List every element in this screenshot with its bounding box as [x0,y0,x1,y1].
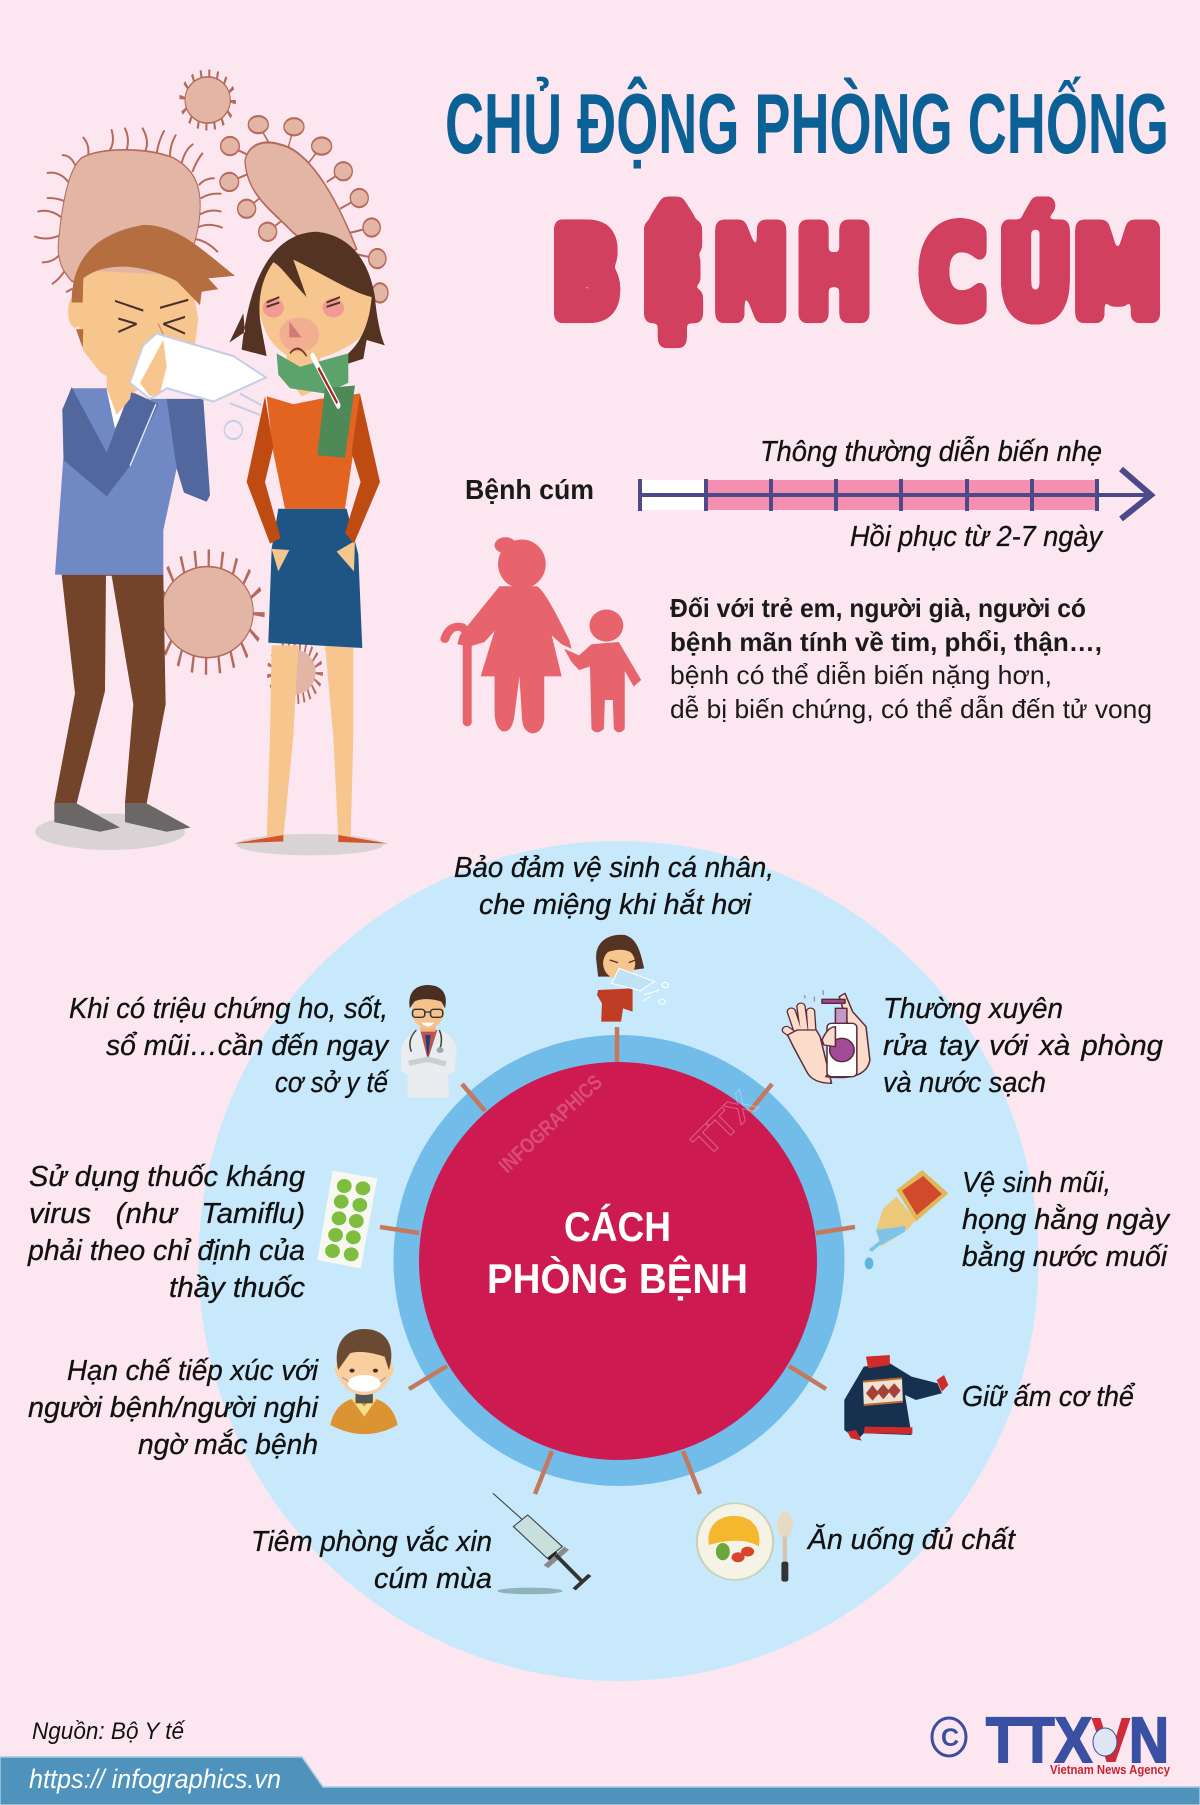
text block: high-risk groups: Đối với trẻ em, người già, người có [670,593,1086,623]
text: nose and throat hygiene [962,1167,1170,1273]
text: wash hands: rửa tay với xà phòng [883,1030,1163,1062]
text: antiviral medicine [27,1161,305,1304]
icon: pill blister pack [317,1171,377,1268]
text: wash hands: và nước sạch [883,1067,1046,1099]
text: limit contact: người bệnh/người nghi [28,1392,320,1424]
icon: small virus top [183,75,232,125]
text: nose and throat hygiene: họng hằng ngày [962,1203,1170,1236]
icon: grandmother and child silhouette [445,537,641,733]
text: see a doctor: sổ mũi…cần đến ngay [106,1030,389,1062]
heading: center label: PHÒNG BỆNH [487,1254,748,1302]
footer band [0,1757,1200,1805]
text block: high-risk groups [670,593,1152,724]
heading: bệnh cúm: BỆNH [553,205,871,342]
text: limit contact: ngờ mắc bệnh [138,1428,318,1461]
text: vaccination [251,1525,492,1595]
logo: TTXVN: V [1091,1704,1131,1776]
text: vaccination: cúm mùa [374,1563,492,1595]
panel: prevention circle: TTX [685,1083,766,1164]
heading: bệnh cúm [553,204,1161,342]
text: antiviral medicine: Sử dụng thuốc kháng [29,1161,305,1193]
logo: TTXVN [932,1704,1171,1777]
heading: center label [487,1203,748,1302]
text: antiviral medicine: thầy thuốc [169,1272,305,1304]
figure: man sneezing [35,225,266,850]
text: vaccination: Tiêm phòng vắc xin [251,1525,492,1558]
heading: center label: CÁCH [564,1203,671,1250]
text: eat well: Ăn uống đủ chất [806,1523,1017,1556]
logo: TTXVN: N [1129,1704,1169,1776]
icon: sweater [844,1355,948,1441]
text: wash hands: Thường xuyên [883,993,1063,1025]
text: see a doctor: cơ sở y tế [275,1067,390,1099]
text: limit contact: Hạn chế tiếp xúc với [67,1355,319,1387]
text block: high-risk groups: bệnh mãn tính về tim, phổi, thận…, [670,627,1102,657]
text: see a doctor [69,993,390,1099]
text block: high-risk groups: dễ bị biến chứng, có thể dẫn đến tử vong [670,694,1152,724]
text: personal hygiene: che miệng khi hắt hơi [479,888,753,921]
footer url: https:// infographics.vn [29,1764,281,1794]
heading: bệnh cúm: CÚM [921,204,1161,342]
text: personal hygiene: Bảo đảm vệ sinh cá nhân, [454,852,774,884]
icon: large virus behind man [35,128,222,297]
logo: TTXVN: C [941,1724,959,1752]
illustration: sick man and woman with viruses [35,75,388,855]
text: limit contact [28,1355,320,1461]
text: nose and throat hygiene: Vệ sinh mũi, [962,1167,1111,1199]
icon: small virus behind legs [272,647,318,697]
text: see a doctor: Khi có triệu chứng ho, sốt, [69,993,388,1025]
icon: doctor [401,985,457,1097]
text: personal hygiene [454,852,774,921]
icon: elongated virus [220,116,388,302]
caption: usual course: Thông thường diễn biến nhẹ [760,435,1102,468]
timeline arrow [640,469,1151,519]
icon: sneezing woman [596,935,668,1022]
icon: washing hands with soap [786,990,870,1083]
panel: prevention circle: INFOGRAPHICS [495,1071,607,1178]
icon: nasal drop bottle [865,1170,948,1269]
icon: plate of food and spoon [697,1503,793,1582]
icon: boy with mask [330,1329,398,1434]
text block: high-risk groups: bệnh có thể diễn biến nặng hơn, [670,660,1052,690]
text: antiviral medicine: virus (như Tamiflu) [29,1198,305,1230]
source note: Nguồn: Bộ Y tế [32,1718,186,1745]
figure: woman with thermometer [229,232,388,855]
logo: TTXVN: TTX [986,1704,1092,1776]
panel: prevention circle [198,841,1038,1681]
text: wash hands [883,993,1163,1099]
label: bệnh cúm: Bệnh cúm [465,474,594,505]
text: keep warm: Giữ ấm cơ thể [962,1381,1136,1413]
logo: TTXVN: Vietnam News Agency [1050,1762,1171,1777]
text: antiviral medicine: phải theo chỉ định của [27,1235,305,1267]
icon: syringe [493,1493,590,1594]
text: nose and throat hygiene: bằng nước muối [962,1240,1169,1273]
icon: lower virus [157,561,257,663]
caption: recovery: Hồi phục từ 2-7 ngày [850,521,1103,553]
